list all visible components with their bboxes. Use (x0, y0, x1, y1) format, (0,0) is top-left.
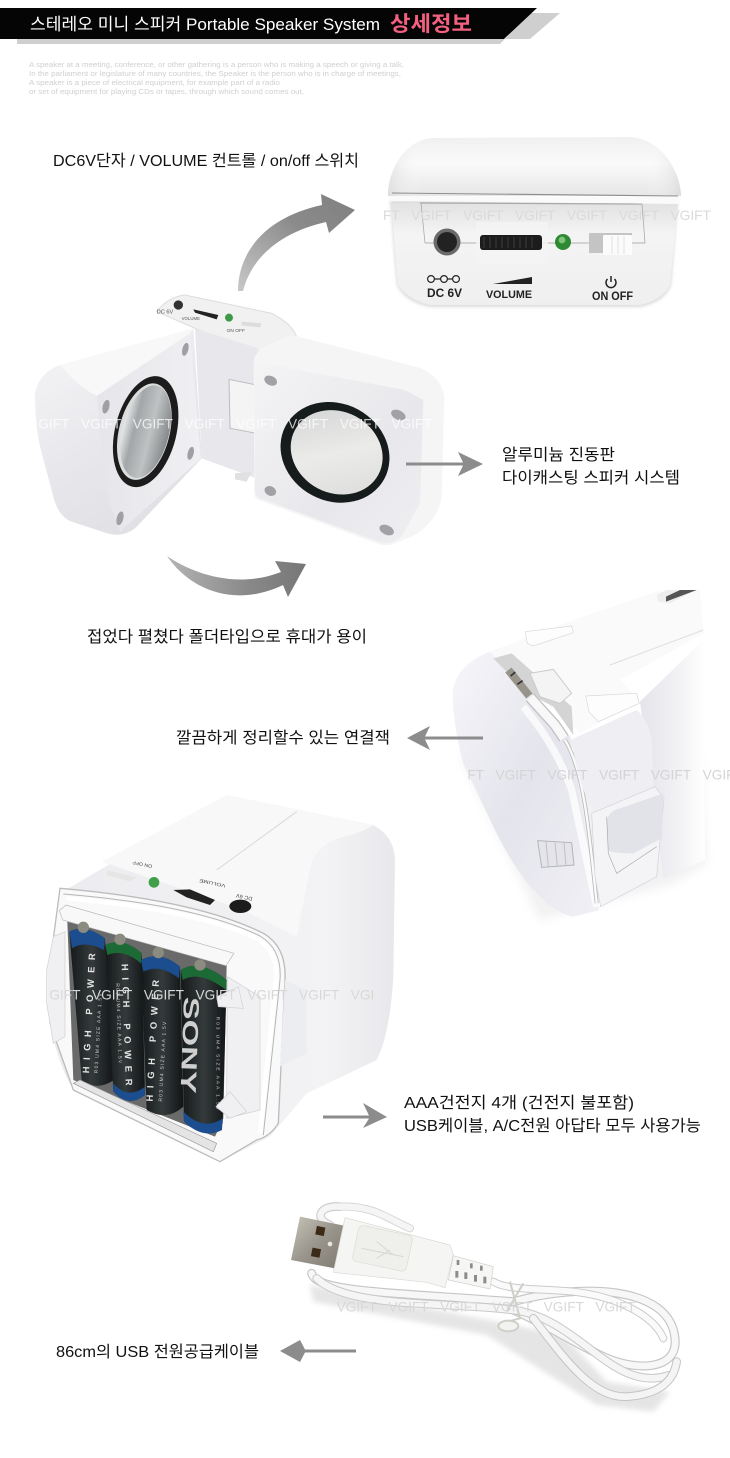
top face (102, 795, 373, 937)
battery 4: SONY (176, 996, 204, 1094)
watermark: FT VGIFT VGIFT VGIFT VGIFT VGIFT VGIFT (383, 208, 711, 223)
polarity symbol (428, 276, 459, 282)
left speaker body (35, 328, 202, 535)
battery 4: R03 UM4 SIZE AAA 1.5V (215, 1017, 221, 1111)
battery 3: HIGH POWER (145, 979, 161, 1102)
USB metal shell (291, 1217, 344, 1268)
control strip (107, 860, 253, 913)
left speaker driver (102, 369, 189, 494)
label: connector: 깔끔하게 정리할수 있는 연결잭 (176, 729, 390, 747)
hinge lower (592, 787, 664, 907)
battery 2: HIGH POWER (120, 964, 134, 1086)
soft shadow (310, 1285, 670, 1412)
springs top (78, 922, 206, 971)
photo: battery compartment (47, 795, 395, 1162)
strain relief (448, 1256, 493, 1289)
battery 1: HIGH POWER (81, 953, 97, 1073)
power icon (606, 276, 616, 288)
watermark: GIFT VGIFT VGIFT VGIFT VGIFT VGIFT VGI (49, 987, 374, 1002)
control strip: ON OFF (227, 328, 245, 333)
jack recess (493, 653, 573, 735)
battery 3 (141, 956, 183, 1115)
arrow: to battery (323, 1103, 387, 1128)
volume wheel (480, 235, 542, 250)
label: battery and power: USB케이블, A/C전원 아답타 모두 사용가능 (404, 1117, 701, 1135)
control strip: DC 6V (235, 892, 253, 901)
label: battery and power: AAA건전지 4개 (건전지 불포함) (404, 1094, 634, 1112)
USB plug body (333, 1218, 453, 1288)
label: battery and power (404, 1094, 701, 1135)
control strip: VOLUME (182, 316, 200, 321)
photo: unfolded speaker (35, 295, 453, 545)
battery 1: R03 UM4 SIZE AAA 1.5V (94, 993, 104, 1073)
label: speaker system: 다이캐스팅 스피커 시스템 (502, 469, 680, 487)
USB contact windows (311, 1226, 332, 1258)
audio plug (508, 670, 597, 903)
header title: 스테레오 미니 스피커 Portable Speaker System (30, 15, 380, 34)
battery 2: R03 UM4 SIZE AAA 1.5V (114, 983, 123, 1064)
right speaker driver (263, 383, 407, 522)
intro paragraph: In the parliament or legislature of many countries, the Speaker is the person who is in charge of meetings, (29, 69, 401, 78)
vent (538, 841, 574, 867)
arrow: to cable storage (407, 726, 483, 750)
photo: cable storage (453, 590, 730, 920)
control strip: ON OFF (132, 860, 153, 869)
watermark: GIFT VGIFT VGIFT VGIFT VGIFT VGIFT VGIFT VGIFT V (38, 416, 453, 431)
battery 1 (69, 929, 114, 1086)
hinge block (570, 710, 653, 813)
watermark: FT VGIFT VGIFT VGIFT VGIFT VGIF (467, 767, 730, 782)
label: controls: DC6V단자 / VOLUME 컨트롤 / on/off 스위치 (53, 152, 359, 170)
contact bar top (59, 905, 234, 966)
ON OFF label: ON OFF (592, 291, 633, 303)
power switch (589, 233, 632, 255)
arrow: curved folding (167, 556, 306, 597)
intro paragraph (29, 60, 404, 96)
header highlight: 상세정보 (390, 13, 472, 36)
LED (555, 234, 571, 250)
battery cavity (67, 922, 227, 1137)
label: folder type: 접었다 펼쳤다 폴더타입으로 휴대가 용이 (87, 628, 367, 646)
battery 2 (105, 942, 145, 1101)
control strip: VOLUME (199, 878, 226, 888)
cable tie (498, 1282, 523, 1331)
photo: USB cable (291, 1207, 677, 1412)
watermark: VGIFT VGIFT VGIFT VGIFT VGIFT VGIFT (337, 1300, 636, 1315)
volume wedge (493, 277, 532, 284)
arrow: curved up to controls (238, 194, 355, 291)
USB logo (362, 1242, 403, 1258)
body side (640, 640, 705, 878)
arrow: to USB cable (280, 1340, 356, 1362)
intro paragraph: or set of equipment for playing CDs or tapes, through which sound comes out, (29, 87, 304, 96)
battery 3: R03 UM4 SIZE AAA 1.5V (158, 1021, 168, 1102)
battery 4 (176, 966, 227, 1134)
label: USB cable: 86cm의 USB 전원공급케이블 (56, 1343, 259, 1361)
end cap (453, 652, 599, 917)
jack (434, 228, 460, 256)
hinge (195, 328, 258, 482)
intro paragraph: A speaker is a piece of electrical equipment, for example part of a radio (29, 78, 280, 87)
rear housing (157, 295, 297, 353)
soft shadow (460, 757, 707, 920)
DC 6V label: DC 6V (427, 288, 462, 300)
side clips (47, 932, 260, 1118)
contact bar bottom (73, 1080, 217, 1152)
tabs (525, 626, 639, 722)
intro paragraph: A speaker at a meeting, conference, or other gathering is a person who is making a speech or giving a talk, (29, 60, 404, 69)
control strip (157, 300, 262, 333)
cube body (48, 795, 395, 1162)
right screw holes (263, 374, 407, 537)
header banner (0, 8, 560, 44)
control strip: DC 6V (157, 309, 174, 315)
top plate (490, 590, 703, 733)
left screw holes (101, 342, 195, 526)
label: speaker system (502, 446, 680, 487)
arrow: to speaker drivers (406, 452, 483, 476)
VOLUME label: VOLUME (486, 289, 532, 301)
photo: control panel close-up (383, 137, 711, 307)
outer frame (48, 888, 285, 1162)
label: speaker system: 알루미늄 진동판 (502, 446, 615, 464)
cable strands (312, 1207, 677, 1397)
right speaker body (254, 336, 444, 545)
